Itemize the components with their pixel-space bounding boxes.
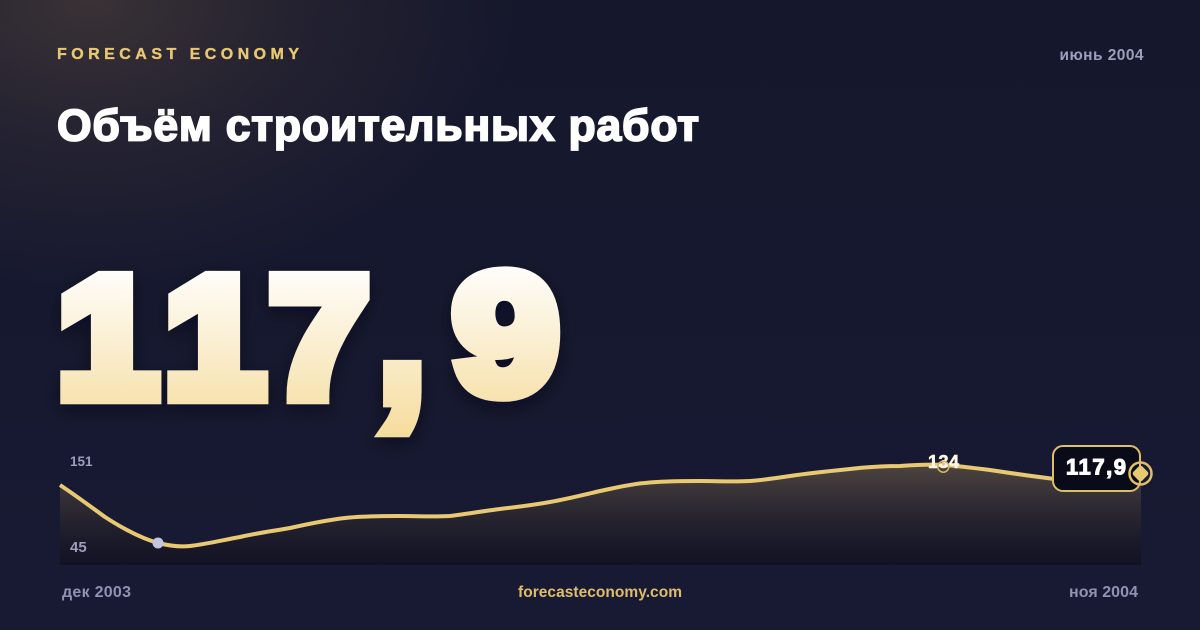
source link: forecasteconomy.com [518,584,682,601]
big value: 1 [58,244,158,433]
chart area fill [60,465,1141,565]
minimum marker [152,538,164,548]
axis minimum label: 45 [70,539,87,556]
date label: июнь 2004 [1060,47,1144,64]
axis maximum label: 151 [70,454,93,469]
start date label: дек 2003 [62,584,131,601]
big value: 1 [165,244,265,433]
big value: 7 [270,242,369,432]
area chart [60,446,1152,565]
big value: , [380,223,425,439]
current value callout: 117,9 [1066,454,1126,480]
chart line [60,465,1055,546]
current value callout [1053,446,1140,491]
big value: 9 [454,239,558,428]
end date label: ноя 2004 [1069,584,1138,601]
title: Объём строительных работ [57,102,699,150]
brand label: FORECAST ECONOMY [57,46,299,63]
big value [58,223,558,439]
current value marker [1130,462,1152,484]
peak marker: 134 [928,452,959,472]
